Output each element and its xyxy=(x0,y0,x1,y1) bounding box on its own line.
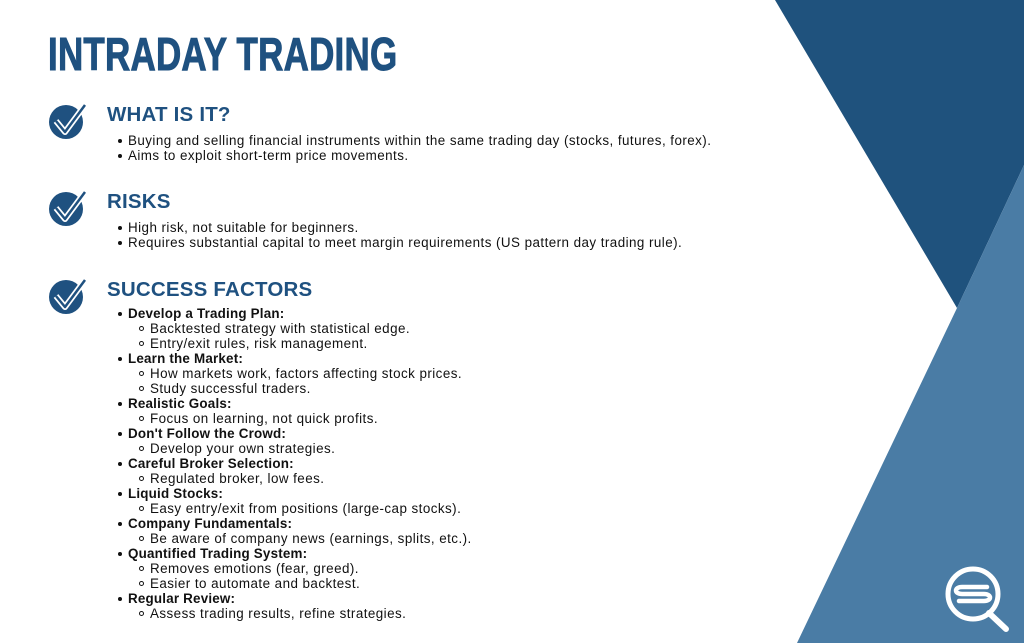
text: what is it bullets xyxy=(118,133,711,163)
text: risks bullets xyxy=(118,220,682,250)
icon: check success xyxy=(49,279,86,314)
text: Removes emotions (fear, greed). xyxy=(150,561,359,576)
text: Quantified Trading System: xyxy=(128,546,307,561)
text: Don't Follow the Crowd: xyxy=(128,426,286,441)
text: Buying and selling financial instruments within the same trading day (stocks, futures, forex). xyxy=(128,133,711,148)
icon: check risks xyxy=(49,191,86,226)
text: Entry/exit rules, risk management. xyxy=(150,336,368,351)
text: Backtested strategy with statistical edge. xyxy=(150,321,410,336)
text: Assess trading results, refine strategies. xyxy=(150,606,406,621)
text: Develop a Trading Plan: xyxy=(128,306,284,321)
text: High risk, not suitable for beginners. xyxy=(128,220,359,235)
text: Focus on learning, not quick profits. xyxy=(150,411,378,426)
icon: check what is it xyxy=(49,104,86,139)
text: Requires substantial capital to meet margin requirements (US pattern day trading rule). xyxy=(128,235,682,250)
title: INTRADAY TRADING xyxy=(48,28,397,80)
text: success factors list xyxy=(118,306,472,621)
heading: what is it: WHAT IS IT? xyxy=(107,103,231,126)
heading: risks: RISKS xyxy=(107,190,171,213)
text: Regular Review: xyxy=(128,591,235,606)
text: Aims to exploit short-term price movements. xyxy=(128,148,409,163)
text: Liquid Stocks: xyxy=(128,486,223,501)
text: Easy entry/exit from positions (large-cap stocks). xyxy=(150,501,461,516)
text: Realistic Goals: xyxy=(128,396,232,411)
text: Careful Broker Selection: xyxy=(128,456,294,471)
text: Study successful traders. xyxy=(150,381,311,396)
heading: success factors: SUCCESS FACTORS xyxy=(107,278,312,301)
text: Learn the Market: xyxy=(128,351,243,366)
text: Be aware of company news (earnings, splits, etc.). xyxy=(150,531,472,546)
text: How markets work, factors affecting stock prices. xyxy=(150,366,462,381)
text: Company Fundamentals: xyxy=(128,516,292,531)
text: Regulated broker, low fees. xyxy=(150,471,324,486)
text: Easier to automate and backtest. xyxy=(150,576,360,591)
icon: logo xyxy=(946,566,1009,632)
text: Develop your own strategies. xyxy=(150,441,335,456)
